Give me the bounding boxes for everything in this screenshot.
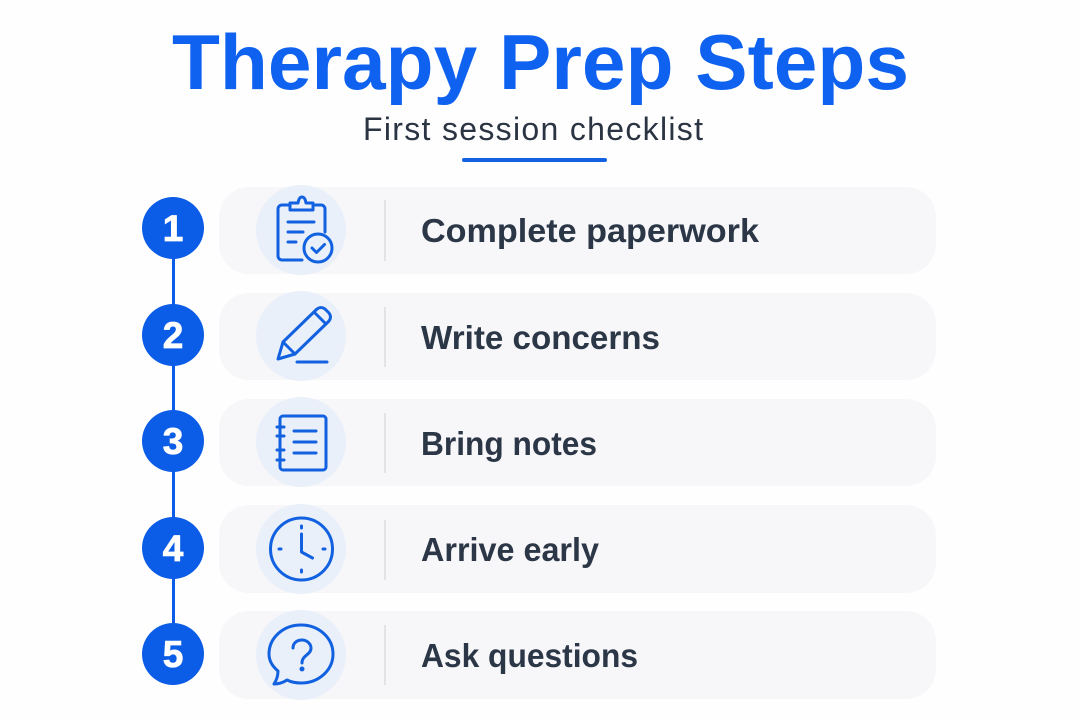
- timeline connector: [172, 228, 175, 654]
- step 3 label: Bring notes: [421, 425, 597, 462]
- step 5: ask questions: [142, 610, 936, 700]
- step 5 divider: [384, 625, 386, 685]
- step 3 number: [142, 410, 204, 472]
- step 4 divider: [384, 520, 386, 580]
- step 1: complete paperwork: [142, 185, 936, 275]
- icon: clipboard with check: [256, 185, 346, 275]
- step 3 number: 3: [163, 421, 183, 462]
- icon: clock: [256, 504, 346, 594]
- step 2: write concerns: [142, 291, 936, 381]
- subtitle: First session checklist: [363, 111, 703, 147]
- step 4 label: Arrive early: [421, 531, 600, 568]
- step 5 number: [142, 623, 204, 685]
- step 2 number: [142, 304, 204, 366]
- step 3 card: [219, 399, 936, 486]
- step 4: arrive early: [142, 504, 936, 594]
- title: Therapy Prep Steps: [172, 18, 909, 106]
- icon: question speech bubble: [256, 610, 346, 700]
- step 1 card: [219, 187, 936, 274]
- step 1 number: 1: [163, 208, 183, 249]
- icon: notebook: [256, 397, 346, 487]
- step 3 divider: [384, 413, 386, 473]
- step 2 label: Write concerns: [421, 319, 660, 356]
- step 5 label: Ask questions: [421, 637, 638, 674]
- step 1 number: [142, 197, 204, 259]
- step 2 card: [219, 293, 936, 380]
- step 5 number: 5: [163, 634, 183, 675]
- step 2 number: 2: [163, 315, 183, 356]
- step 1 divider: [384, 200, 386, 261]
- step 3: bring notes: [142, 397, 936, 487]
- step 4 number: [142, 517, 204, 579]
- step 4 card: [219, 505, 936, 593]
- step 4 number: 4: [163, 528, 184, 569]
- icon: pencil: [256, 291, 346, 381]
- title underline: [462, 158, 607, 162]
- step 5 card: [219, 611, 936, 699]
- step 1 label: Complete paperwork: [421, 212, 760, 249]
- step 2 divider: [384, 307, 386, 367]
